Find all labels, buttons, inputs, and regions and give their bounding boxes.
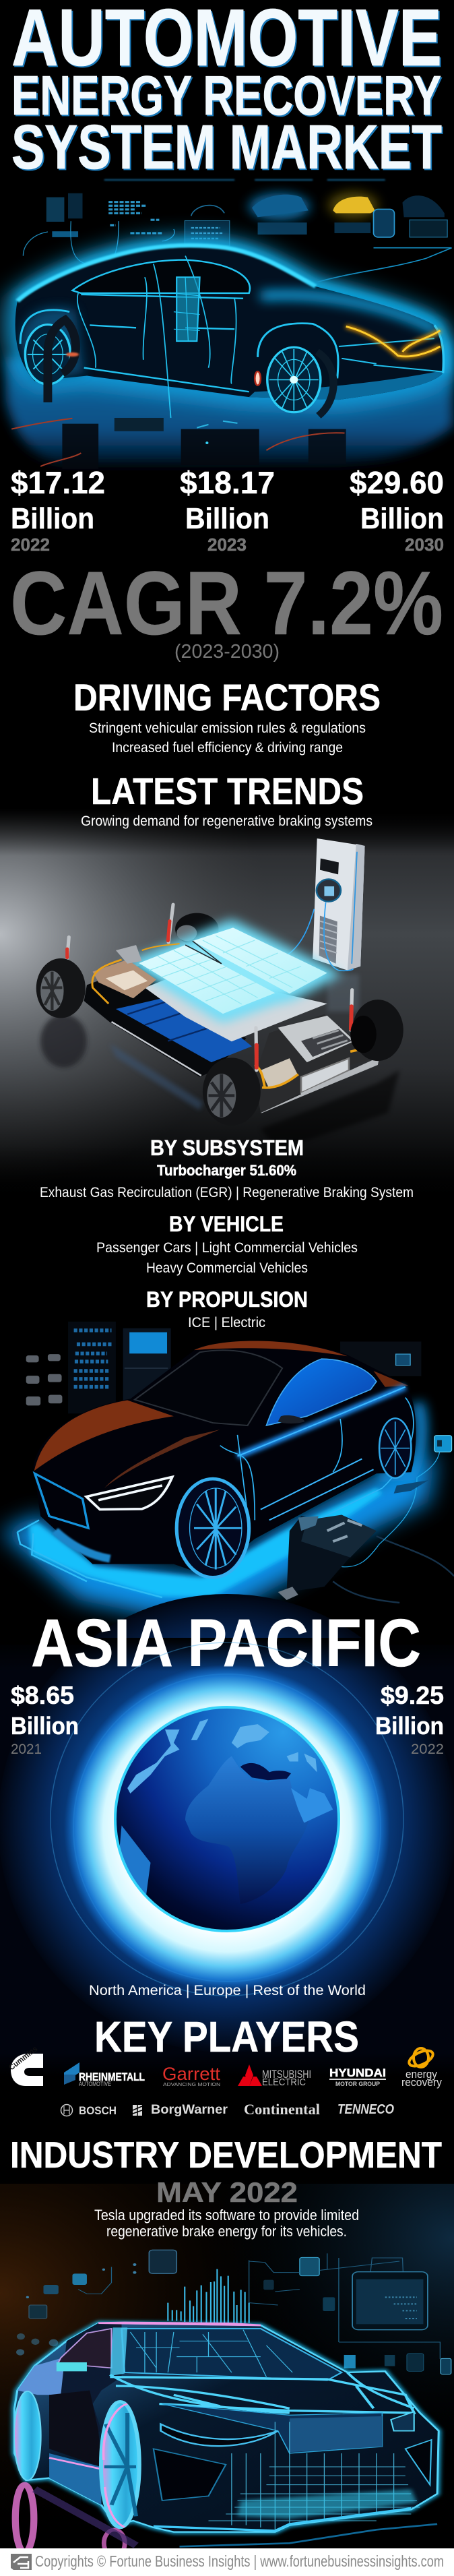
market size figures xyxy=(11,465,444,555)
logo: Mitsubishi Electric xyxy=(238,2064,311,2088)
segment: by vehicle: Passenger Cars | Light Commercial Vehicles xyxy=(96,1240,358,1256)
regional value 2022: 2022 xyxy=(411,1742,444,1757)
outer rings xyxy=(51,1643,403,1996)
logo: Continental: Continental xyxy=(244,2101,320,2118)
CAGR figure: (2023-2030) xyxy=(174,641,280,663)
driving factors: Increased fuel efficiency & driving range xyxy=(112,740,343,756)
rear wheel xyxy=(379,1418,411,1478)
regional value 2021: 2021 xyxy=(11,1742,42,1757)
other regions: North America | Europe | Rest of the World xyxy=(89,1983,366,1998)
segment: by vehicle: BY VEHICLE xyxy=(169,1212,284,1236)
latest trends xyxy=(81,770,372,829)
front electronics xyxy=(92,944,180,1004)
value 2023 xyxy=(180,465,275,555)
development description xyxy=(94,2207,359,2240)
floor reflections xyxy=(15,2485,437,2556)
engine bay xyxy=(255,1014,379,1113)
driving factors: DRIVING FACTORS xyxy=(73,676,381,718)
panel: EV platform studio background xyxy=(0,809,454,1228)
wireframe mesh xyxy=(208,2422,420,2529)
tablet xyxy=(352,2258,428,2330)
logo: Energy Recovery: recovery xyxy=(401,2076,442,2089)
logo: Energy Recovery xyxy=(401,2048,442,2089)
car glow xyxy=(15,245,443,400)
hero illustration: glowing transparent electric car xyxy=(6,180,453,469)
driving factors: Stringent vehicular emission rules & regulations xyxy=(89,720,366,736)
side sweep and wiring xyxy=(18,1387,414,1597)
car glow xyxy=(14,2323,439,2532)
segment: by propulsion xyxy=(146,1287,308,1330)
reflections xyxy=(40,975,399,1151)
key player logos xyxy=(7,2044,442,2118)
underglow xyxy=(11,1403,428,1611)
value 2023: Billion xyxy=(185,502,269,535)
segment: by vehicle: Heavy Commercial Vehicles xyxy=(146,1260,308,1276)
logo: Rheinmetall: AUTOMOTIVE xyxy=(79,2081,111,2087)
value 2022 xyxy=(11,465,105,555)
data spikes above roof xyxy=(168,2269,249,2323)
regional value 2021: $8.65 xyxy=(11,1682,74,1709)
logo: Garrett: Garrett xyxy=(162,2064,220,2084)
logo: Tenneco: TENNECO xyxy=(337,2102,394,2117)
charging station xyxy=(288,838,365,971)
car windows and wiring xyxy=(20,256,443,418)
car body xyxy=(15,245,443,400)
regional value 2021: Billion xyxy=(11,1712,79,1740)
value 2022: Billion xyxy=(11,502,94,535)
title xyxy=(11,0,442,182)
logo: Bosch: BOSCH xyxy=(79,2104,117,2117)
logo: Rheinmetall: RHEINMETALL xyxy=(79,2071,145,2083)
logo: Cummins xyxy=(7,2044,43,2086)
front wheel xyxy=(267,347,333,416)
regional value 2022: Billion xyxy=(375,1712,444,1740)
footer bar xyxy=(0,2548,454,2576)
segment: by subsystem xyxy=(40,1136,414,1200)
wall charger and cable xyxy=(342,1436,452,1567)
amber headlight xyxy=(346,326,440,357)
background instrument panels xyxy=(26,1322,421,1413)
segment: by propulsion: BY PROPULSION xyxy=(146,1287,308,1312)
value 2023: 2023 xyxy=(207,534,247,555)
logo: Bosch xyxy=(61,2104,117,2117)
latest trends: Growing demand for regenerative braking systems xyxy=(81,814,372,829)
front wheel xyxy=(176,1479,249,1577)
segment: by subsystem: Turbocharger 51.60% xyxy=(157,1162,296,1179)
chassis frame xyxy=(84,964,327,1077)
value 2030 xyxy=(350,465,444,555)
illustration: wireframe transparent car xyxy=(14,2250,451,2556)
glowing battery pack xyxy=(136,925,330,1017)
body highlight xyxy=(18,245,452,400)
development date: MAY 2022 xyxy=(156,2176,298,2208)
illustration: glowing earth globe xyxy=(51,1643,403,1996)
value 2030: $29.60 xyxy=(350,465,444,500)
logo: Hyundai Motor Group xyxy=(329,2066,386,2087)
value 2030: Billion xyxy=(360,502,444,535)
windshield xyxy=(135,1350,282,1425)
car body xyxy=(33,1341,416,1576)
logo: Mitsubishi Electric: ELECTRIC xyxy=(262,2077,306,2088)
value 2022: $17.12 xyxy=(11,465,105,500)
regional value 2022: $9.25 xyxy=(381,1682,444,1709)
driving factors xyxy=(73,676,381,756)
logo: Garrett: ADVANCING MOTION xyxy=(163,2083,220,2087)
latest trends: LATEST TRENDS xyxy=(91,770,364,812)
development description: Tesla upgraded its software to provide limited xyxy=(94,2207,359,2224)
charging unit xyxy=(278,1514,454,1603)
segment: by subsystem: Exhaust Gas Recirculation (EGR) | Regenerative Braking System xyxy=(40,1185,414,1200)
LED headlight xyxy=(86,1477,172,1510)
value 2023: $18.17 xyxy=(180,465,275,500)
segment: by propulsion: ICE | Electric xyxy=(188,1315,265,1330)
logo: Mitsubishi Electric: MITSUBISHI xyxy=(262,2068,311,2081)
rear wheel xyxy=(25,319,75,402)
rear wheel xyxy=(175,913,219,945)
copper hood and roof xyxy=(34,1341,408,1488)
logo: Energy Recovery: energy xyxy=(406,2068,437,2081)
regional value 2022 xyxy=(375,1682,444,1757)
heading: key players: KEY PLAYERS xyxy=(94,2013,359,2061)
side panels xyxy=(18,2357,67,2395)
logo: Hyundai Motor Group: MOTOR GROUP xyxy=(335,2081,380,2087)
illustration: EV skateboard chassis with charger xyxy=(36,838,403,1151)
logo: BorgWarner: BorgWarner xyxy=(151,2103,228,2117)
development description: regenerative brake energy for its vehicles. xyxy=(106,2223,347,2240)
windows xyxy=(49,2327,342,2467)
illustration: sports car with blue underglow xyxy=(11,1322,454,1611)
wheels xyxy=(36,958,403,1126)
segment: by vehicle xyxy=(96,1212,358,1276)
value 2022: 2022 xyxy=(11,534,50,555)
hood creases xyxy=(110,2372,414,2413)
floating data icons xyxy=(16,2250,451,2374)
segment: by subsystem: BY SUBSYSTEM xyxy=(150,1136,304,1160)
Africa xyxy=(185,1756,309,1904)
suspension struts xyxy=(67,904,352,1070)
charging equipment under car xyxy=(11,418,346,469)
icon: Fortune Business Insights logo xyxy=(11,2554,32,2570)
icon row: floating system panels xyxy=(23,180,447,264)
side windows xyxy=(266,1359,377,1425)
logo: Hyundai Motor Group: HYUNDAI xyxy=(329,2066,386,2079)
wheels xyxy=(14,2391,139,2527)
logo: Cummins: Cummins xyxy=(7,2044,39,2072)
car body xyxy=(14,2323,439,2532)
grille and bumper xyxy=(154,2404,431,2501)
regional value 2021 xyxy=(11,1682,79,1757)
panel: globe background xyxy=(0,1594,454,2077)
panel: wireframe car background xyxy=(0,2184,454,2548)
Arabia and Europe and Americas xyxy=(291,1788,333,1822)
value 2030: 2030 xyxy=(405,534,444,555)
logo: Rheinmetall xyxy=(64,2062,145,2087)
